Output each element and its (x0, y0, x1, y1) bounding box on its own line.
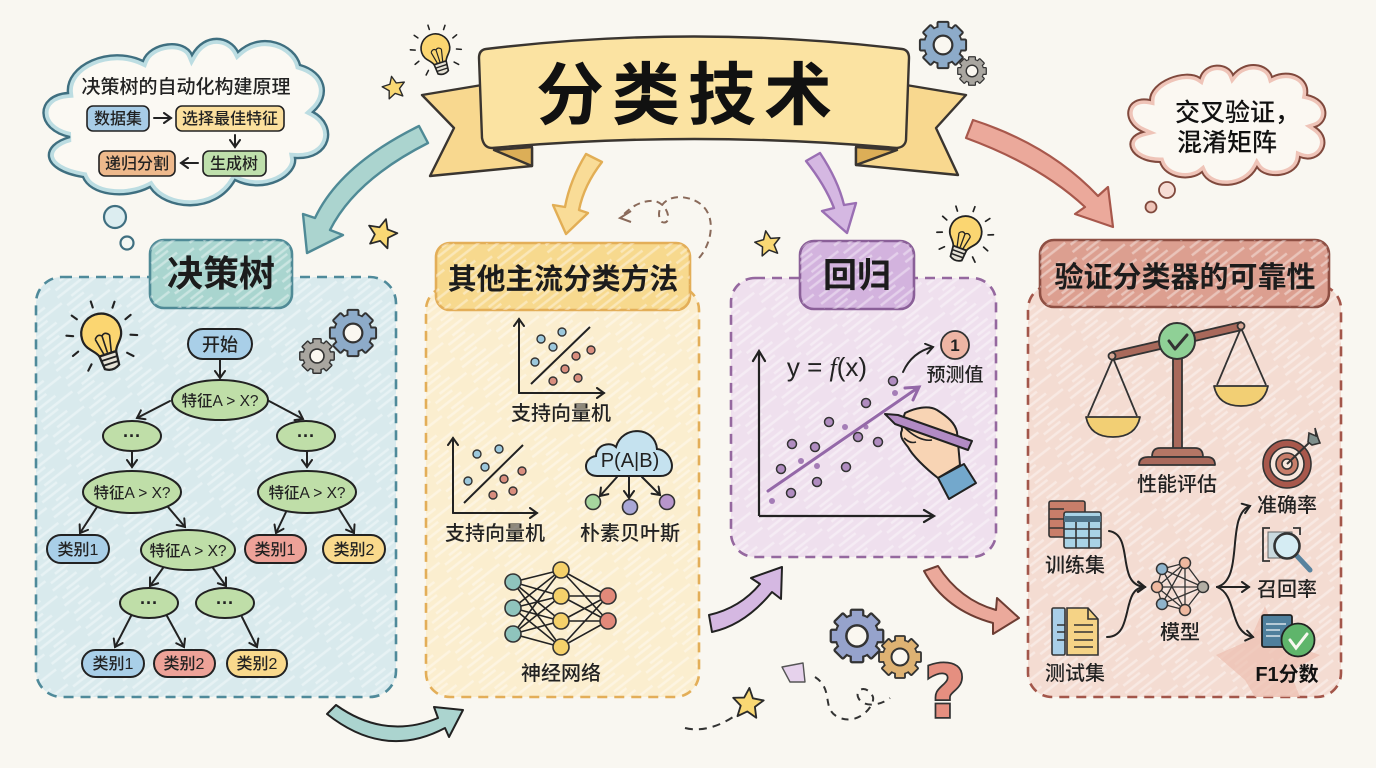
icon: balance scale (1086, 322, 1268, 465)
icon: gears top (920, 22, 986, 85)
title: 分类技术 (536, 58, 840, 134)
node: lower left ellipsis (120, 588, 178, 618)
thought cloud: tree construction (43, 39, 328, 205)
node: right decision (258, 471, 356, 513)
leaf: class 2 yellow: 类别2 (334, 541, 375, 559)
icon: training set table (1049, 501, 1101, 548)
label: test set: 测试集 (1045, 662, 1105, 685)
arrow: teal to decision tree (303, 126, 428, 253)
label: recall: 召回率 (1257, 578, 1317, 601)
chart: SVM scatter top (519, 319, 604, 393)
box: dataset (87, 106, 149, 131)
banner left tail (422, 85, 532, 176)
banner right tail (856, 85, 966, 175)
arrow: purple bottom (709, 567, 782, 632)
title banner (422, 36, 966, 176)
heading: other methods: 其他主流分类方法 (448, 264, 678, 296)
icon: model network (1152, 558, 1208, 616)
icon: test set documents (1052, 608, 1098, 655)
node: root decision: 特征A > X? (181, 392, 259, 410)
label: performance evaluation: 性能评估 (1137, 473, 1217, 496)
node: left ellipsis (103, 421, 161, 451)
label: SVM left: 支持向量机 (445, 522, 545, 545)
leaf: class 1 red: 类别1 (255, 541, 296, 559)
arrow: red bottom (924, 566, 1019, 634)
heading: other methods (436, 243, 690, 310)
icon: paper plane (782, 663, 805, 682)
node: start (188, 329, 252, 359)
node: left decision (83, 471, 181, 513)
icon: F1 report (1262, 615, 1314, 656)
node: left ellipsis: ··· (123, 426, 141, 446)
label: F1 score: F1分数 (1255, 663, 1319, 686)
icon: magnifier recall (1263, 528, 1310, 570)
dashed trail: plane (815, 677, 890, 719)
icon: star two (365, 215, 400, 250)
box: generate tree (203, 151, 266, 176)
box: dataset: 数据集 (94, 110, 142, 128)
heading: classifier reliability (1040, 240, 1329, 307)
label: naive Bayes: 朴素贝叶斯 (580, 522, 680, 545)
cloud text: 交叉验证， (1175, 99, 1300, 127)
panel: decision tree (36, 277, 396, 697)
node: right decision: 特征A > X? (268, 484, 346, 502)
icon: star three (753, 229, 782, 257)
label: predicted value: 预测值 (926, 364, 984, 386)
heading: regression (800, 241, 914, 309)
heading: decision tree: 决策树 (167, 253, 275, 294)
dashed trail: star (685, 717, 733, 729)
flow arrows (154, 118, 235, 163)
icon: naive Bayes cloud: P(A|B) (601, 450, 659, 472)
cloud title: 决策树的自动化构建原理 (81, 76, 291, 98)
icon: question mark: ? (924, 650, 966, 734)
icon: neural network (505, 562, 616, 655)
node: right ellipsis: ··· (297, 426, 315, 446)
node: lower right ellipsis (196, 588, 254, 618)
icon: star one (380, 74, 407, 100)
label: training set: 训练集 (1045, 554, 1105, 577)
decorative blotch (1216, 606, 1320, 697)
leaf: class 1 blue (47, 535, 109, 563)
chart: SVM scatter left (453, 438, 537, 513)
node: lower left ellipsis: ··· (140, 593, 158, 613)
icon: gears bottom (831, 610, 921, 678)
icon: gears in tree panel (300, 310, 376, 373)
node: start: 开始 (202, 335, 238, 355)
arrows: model to metrics (1217, 506, 1253, 637)
arrows: data to model (1107, 531, 1145, 637)
node: center decision: 特征A > X? (149, 542, 227, 560)
arrow: dashed brown loop (620, 197, 711, 258)
label: neural network: 神经网络 (521, 661, 601, 685)
heading: decision tree (150, 240, 292, 308)
arrow: yellow to other methods (553, 154, 602, 234)
leaf: bottom class 1 (82, 650, 144, 677)
badge: number one: 1 (950, 336, 960, 355)
heading: regression: 回归 (823, 257, 891, 295)
leaf: bottom class 2 red (154, 650, 215, 677)
icon: light bulb in tree panel (59, 291, 145, 380)
cloud text line two: 混淆矩阵 (1177, 129, 1277, 157)
chart: regression scatter (753, 351, 934, 522)
arrow: to prediction (903, 347, 933, 372)
leaf: class 2 yellow (323, 535, 385, 563)
panel: classifier reliability (1028, 285, 1341, 697)
label: model: 模型 (1160, 621, 1200, 644)
label: accuracy: 准确率 (1257, 494, 1317, 517)
arrow: teal bottom (327, 705, 463, 741)
leaf: bottom class 2 yellow (227, 650, 287, 677)
label: SVM top: 支持向量机 (511, 402, 611, 425)
panel: other classification methods (426, 286, 699, 697)
node: left decision: 特征A > X? (93, 484, 171, 502)
label: formula: y = f(x) (787, 352, 867, 382)
thought cloud: validation (1128, 65, 1325, 185)
heading: classifier reliability: 验证分类器的可靠性 (1054, 261, 1316, 294)
panel: regression (731, 278, 996, 557)
tree connectors (80, 359, 354, 647)
badge: number one (941, 331, 969, 359)
leaf: class 1 blue: 类别1 (58, 541, 99, 559)
box: recursive split: 递归分割 (105, 154, 169, 173)
leaf: bottom class 2 red: 类别2 (164, 655, 205, 673)
icon: target (1263, 428, 1320, 488)
arrow: red to validation (966, 120, 1113, 227)
icon: bulb top left (405, 18, 467, 81)
box: choose best feature: 选择最佳特征 (182, 110, 278, 128)
box: choose best feature (176, 106, 284, 131)
leaf: bottom class 1: 类别1 (93, 655, 134, 673)
icon: hand with pen (885, 407, 976, 499)
leaf: bottom class 2 yellow: 类别2 (237, 655, 278, 673)
node: lower right ellipsis: ··· (216, 593, 234, 613)
cloud bubbles left (104, 206, 134, 250)
node: center decision (141, 530, 235, 570)
arrow: purple to regression (806, 153, 856, 233)
leaf: class 1 red (245, 535, 306, 563)
cloud bubbles right (1146, 182, 1175, 212)
box: recursive split (99, 151, 175, 176)
node: right ellipsis (277, 421, 335, 451)
banner main ribbon (479, 36, 909, 148)
box: generate tree: 生成树 (210, 155, 258, 173)
node: root decision (172, 380, 268, 420)
icon: star four (732, 687, 765, 718)
icon: naive Bayes cloud (586, 431, 674, 514)
banner folds (494, 147, 897, 166)
icon: bulb top right (930, 198, 1000, 270)
